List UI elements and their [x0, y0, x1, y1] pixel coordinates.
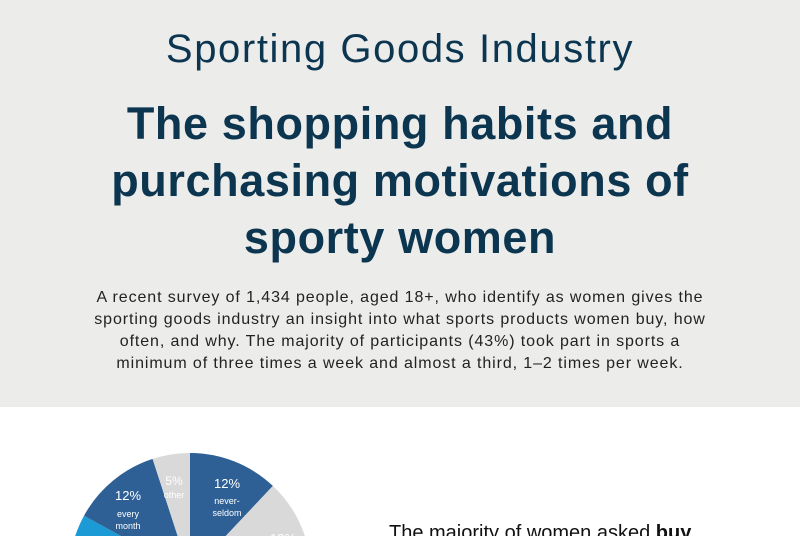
title: [111, 98, 689, 263]
header panel: [0, 0, 800, 407]
title: The shopping habits and: [127, 98, 673, 149]
intro text: sporting goods industry an insight into what sports products women buy, how: [94, 311, 706, 328]
intro text: minimum of three times a week and almost a third, 1–2 times per week.: [116, 355, 684, 372]
pie chart: seldom: [212, 508, 242, 518]
title: sporty women: [244, 212, 556, 263]
subtitle: Sporting Goods Industry: [166, 27, 634, 71]
pie chart: 12%: [115, 488, 141, 503]
title: purchasing motivations of: [111, 155, 689, 206]
pie chart: every: [117, 509, 140, 519]
pie chart: month: [115, 521, 141, 531]
intro text: [94, 289, 706, 372]
intro text: often, and why. The majority of participants (43%) took part in sports a: [120, 333, 680, 350]
pie chart: never-: [214, 496, 240, 506]
pie chart: other: [164, 490, 184, 500]
pie chart: 5%: [165, 474, 183, 488]
pie chart: 12%: [214, 476, 240, 491]
intro text: A recent survey of 1,434 people, aged 18+, who identify as women gives the: [97, 289, 703, 306]
pie chart: [75, 453, 692, 536]
